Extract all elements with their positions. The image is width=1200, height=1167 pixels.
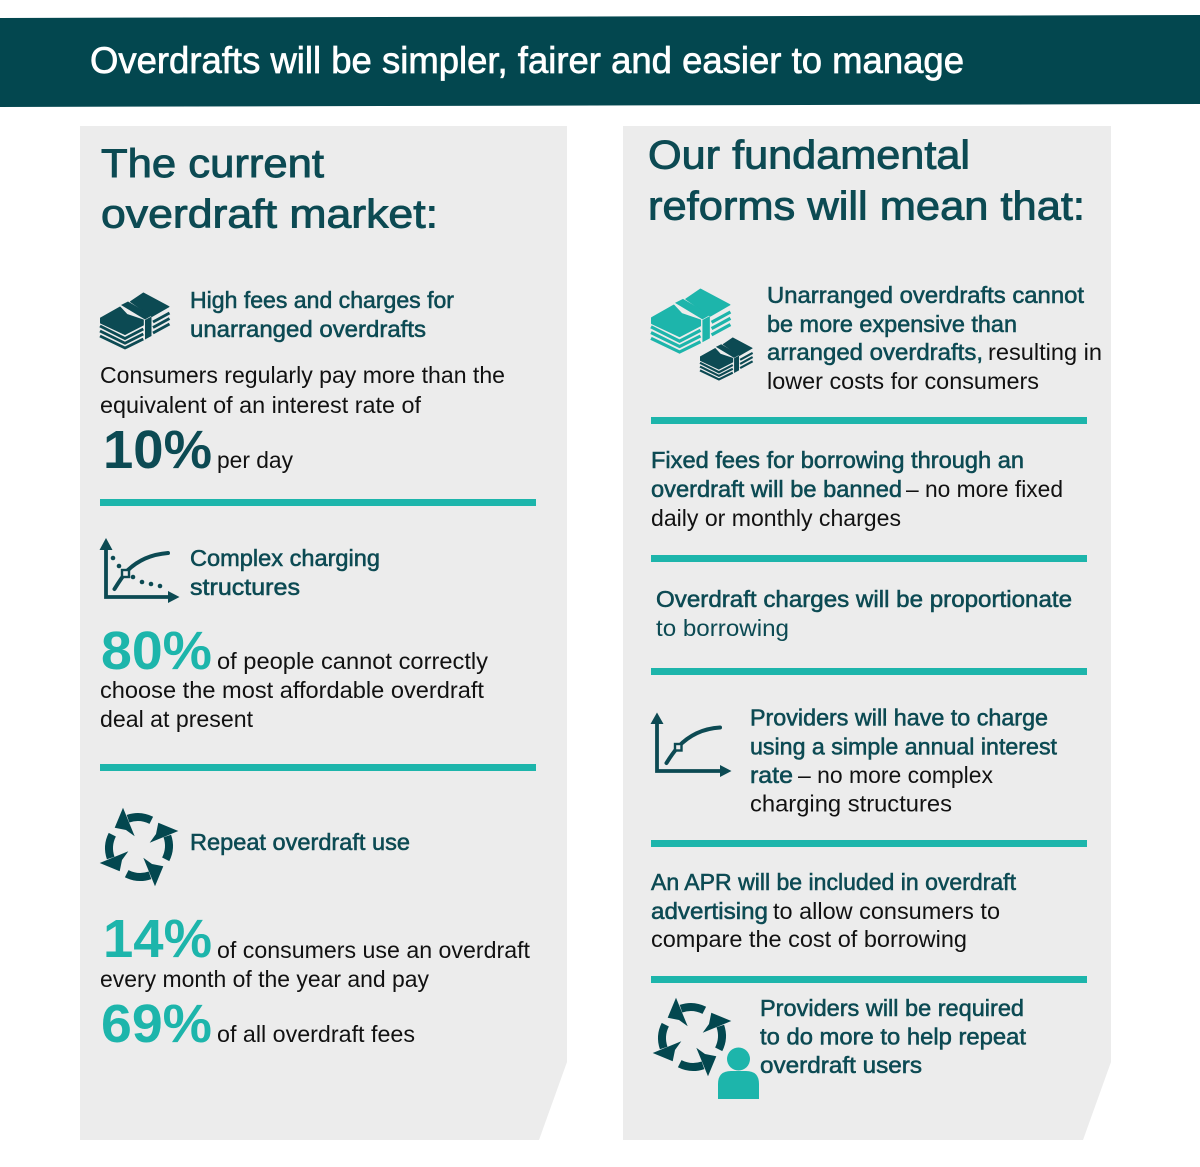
- text: interest rate equivalent: equivalent of an interest rate of: [100, 392, 422, 418]
- subheading: complex charging: structures: [190, 574, 300, 600]
- text: fixed fees banned: – no more fixed: [906, 476, 1063, 502]
- panel heading: reforms: reforms will mean that:: [648, 184, 1085, 228]
- panel: fundamental reforms: [623, 126, 1111, 1140]
- icon: repeat arrows: [100, 808, 178, 886]
- text: help repeat users: to do more to help repeat: [760, 1024, 1027, 1050]
- statistic: 10% per day: per day: [217, 447, 293, 473]
- text: proportionate charges: Overdraft charges will be proportionate: [656, 586, 1072, 612]
- text: help repeat users: overdraft users: [760, 1052, 922, 1078]
- text: unarranged overdrafts reform: [767, 282, 1102, 394]
- text: APR advertising: advertising: [651, 898, 768, 924]
- icon: complex chart: [100, 538, 180, 603]
- panel heading: reforms: [648, 134, 1085, 228]
- statistic: 69% of fees: of all overdraft fees: [217, 1021, 415, 1047]
- statistic: 14% of consumers: of consumers use an overdraft: [217, 937, 531, 963]
- subheading: high fees: [190, 287, 454, 342]
- title banner: Overdrafts will be simpler, fairer and easier to manage: [90, 40, 964, 81]
- icon: repeat arrows with person: [653, 998, 759, 1099]
- text: simple annual interest rate: – no more complex: [798, 762, 993, 788]
- statistic: 80% of people: deal at present: [100, 706, 254, 732]
- statistic: 69% of fees: 69%: [101, 994, 212, 1054]
- text: fixed fees banned: [651, 447, 1063, 531]
- text: interest rate equivalent: Consumers regularly pay more than the: [100, 362, 505, 388]
- text: simple annual interest rate: Providers will have to charge: [750, 704, 1048, 730]
- text: fixed fees banned: Fixed fees for borrowing through an: [651, 447, 1024, 473]
- subheading: high fees: High fees and charges for: [190, 287, 454, 313]
- text: unarranged overdrafts reform: Unarranged overdrafts cannot: [767, 282, 1085, 308]
- text: APR advertising: to allow consumers to: [773, 898, 1000, 924]
- text: simple annual interest rate: rate: [750, 762, 793, 788]
- subheading: complex charging: Complex charging: [190, 545, 380, 571]
- panel heading: current market: overdraft market:: [101, 192, 438, 236]
- statistic: 10% per day: [103, 420, 293, 480]
- statistic: 14% of consumers: every month of the year and pay: [100, 966, 429, 992]
- title banner: [0, 15, 1200, 107]
- subheading: high fees: unarranged overdrafts: [190, 316, 426, 342]
- text: unarranged overdrafts reform: resulting in: [988, 339, 1102, 365]
- panel heading: current market: The current: [101, 142, 324, 186]
- subheading: complex charging: [190, 545, 380, 600]
- icon: large and small banknote stacks: [651, 289, 753, 379]
- text: simple annual interest rate: using a simple annual interest: [750, 734, 1058, 760]
- text: unarranged overdrafts reform: arranged overdrafts,: [767, 339, 983, 365]
- text: unarranged overdrafts reform: be more expensive than: [767, 311, 1017, 337]
- statistic: 10% per day: 10%: [103, 420, 212, 480]
- statistic: 80% of people: of people cannot correctly: [217, 648, 489, 674]
- text: simple annual interest rate: charging structures: [750, 790, 952, 816]
- statistic: 80% of people: 80%: [101, 621, 212, 681]
- statistic: 80% of people: [100, 621, 489, 732]
- text: APR advertising: compare the cost of borrowing: [651, 926, 967, 952]
- text: proportionate charges: [656, 586, 1072, 641]
- text: help repeat users: [760, 995, 1027, 1078]
- text: fixed fees banned: overdraft will be banned: [651, 476, 902, 502]
- text: help repeat users: Providers will be required: [760, 995, 1024, 1021]
- icon: simple rate chart: [650, 712, 732, 777]
- panel heading: reforms: Our fundamental: [648, 134, 970, 178]
- text: simple annual interest rate: [750, 704, 1058, 816]
- text: proportionate charges: to borrowing: [656, 615, 789, 641]
- statistic: 69% of fees: [101, 994, 415, 1054]
- text: APR advertising: [651, 869, 1017, 952]
- subheading: repeat use: Repeat overdraft use: [190, 829, 410, 855]
- statistic: 14% of consumers: 14%: [103, 909, 212, 969]
- panel heading: current market: [101, 142, 438, 236]
- icon: stack of banknotes: [100, 293, 170, 348]
- text: fixed fees banned: daily or monthly charges: [651, 505, 901, 531]
- text: APR advertising: An APR will be included in overdraft: [651, 869, 1017, 895]
- statistic: 14% of consumers: [100, 909, 531, 992]
- panel: the current overdraft market: [80, 126, 567, 1140]
- text: interest rate equivalent: [100, 362, 505, 418]
- statistic: 80% of people: choose the most affordable overdraft: [100, 677, 485, 703]
- text: unarranged overdrafts reform: lower costs for consumers: [767, 368, 1039, 394]
